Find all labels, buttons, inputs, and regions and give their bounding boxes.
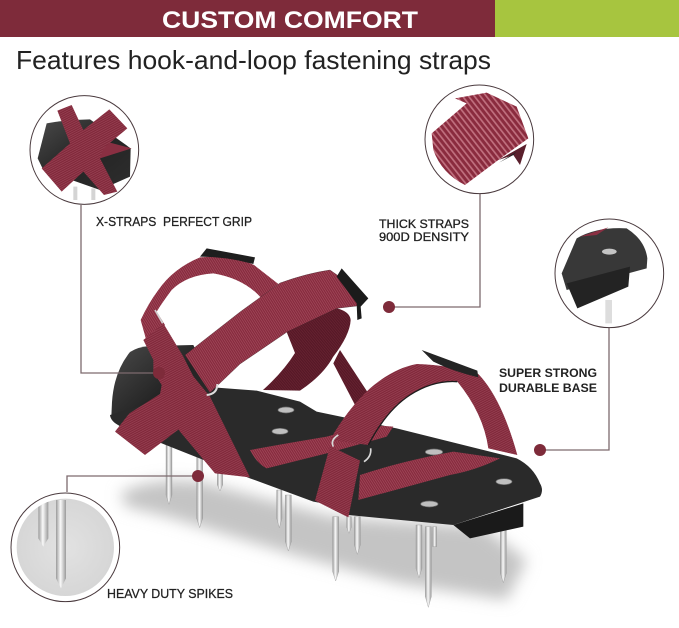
title: CUSTOM COMFORT bbox=[162, 7, 418, 34]
connector line bbox=[540, 328, 609, 450]
x strap upper band bbox=[115, 323, 205, 455]
connector line bbox=[67, 476, 198, 492]
label: HEAVY DUTY SPIKES bbox=[107, 587, 233, 601]
header band: green bbox=[495, 0, 679, 37]
velcro tab thick strap bbox=[337, 268, 368, 320]
spikes bbox=[166, 445, 506, 607]
subtitle: Features hook-and-loop fastening straps bbox=[16, 45, 491, 75]
marker dot bbox=[383, 301, 395, 313]
front lower strap bbox=[315, 446, 360, 517]
metal buckle rear bbox=[155, 310, 163, 323]
large thick strap bbox=[185, 270, 361, 393]
sole rivets bbox=[272, 407, 512, 507]
d-rings front bbox=[332, 435, 371, 462]
inset circle: x-straps bbox=[30, 96, 139, 204]
callout: spikes bbox=[11, 470, 233, 602]
header band: maroon bbox=[0, 0, 495, 37]
front arch strap bbox=[330, 364, 517, 455]
callout: thick straps bbox=[379, 85, 534, 313]
inset circle: thick strap bbox=[425, 85, 534, 194]
metal ring bbox=[207, 384, 217, 395]
x strap lower band bbox=[163, 360, 250, 477]
sole lower block bbox=[453, 503, 523, 538]
label: X-STRAPS PERFECT GRIP bbox=[96, 215, 252, 229]
marker dot bbox=[534, 444, 546, 456]
marker dot bbox=[192, 470, 204, 482]
tongue strap rear bbox=[250, 425, 393, 468]
velcro tab front bbox=[422, 350, 478, 377]
inner back strap bbox=[263, 308, 351, 391]
marker dot bbox=[153, 367, 165, 379]
velcro tab rear bbox=[200, 248, 255, 264]
ground shadow bbox=[120, 481, 527, 600]
rear arch strap bbox=[141, 257, 278, 342]
product illustration: aerator sandal bbox=[110, 248, 542, 607]
label line 2: 900D DENSITY bbox=[379, 230, 469, 244]
callout: x-straps bbox=[30, 96, 252, 379]
callout: durable base bbox=[499, 219, 664, 456]
label: SUPER STRONG bbox=[499, 366, 597, 380]
narrow back strap bbox=[333, 350, 368, 405]
connector line bbox=[81, 205, 159, 373]
tongue strap front bbox=[358, 452, 500, 500]
connector line bbox=[389, 194, 480, 307]
rear heel cup bbox=[111, 345, 213, 440]
label: THICK STRAPS bbox=[379, 217, 469, 231]
inset circle: base bbox=[555, 219, 664, 328]
sole plate bbox=[110, 387, 542, 525]
inset circle: spikes bbox=[11, 493, 120, 602]
label line 2: DURABLE BASE bbox=[499, 381, 597, 395]
arch inner shadow edge bbox=[368, 381, 457, 445]
